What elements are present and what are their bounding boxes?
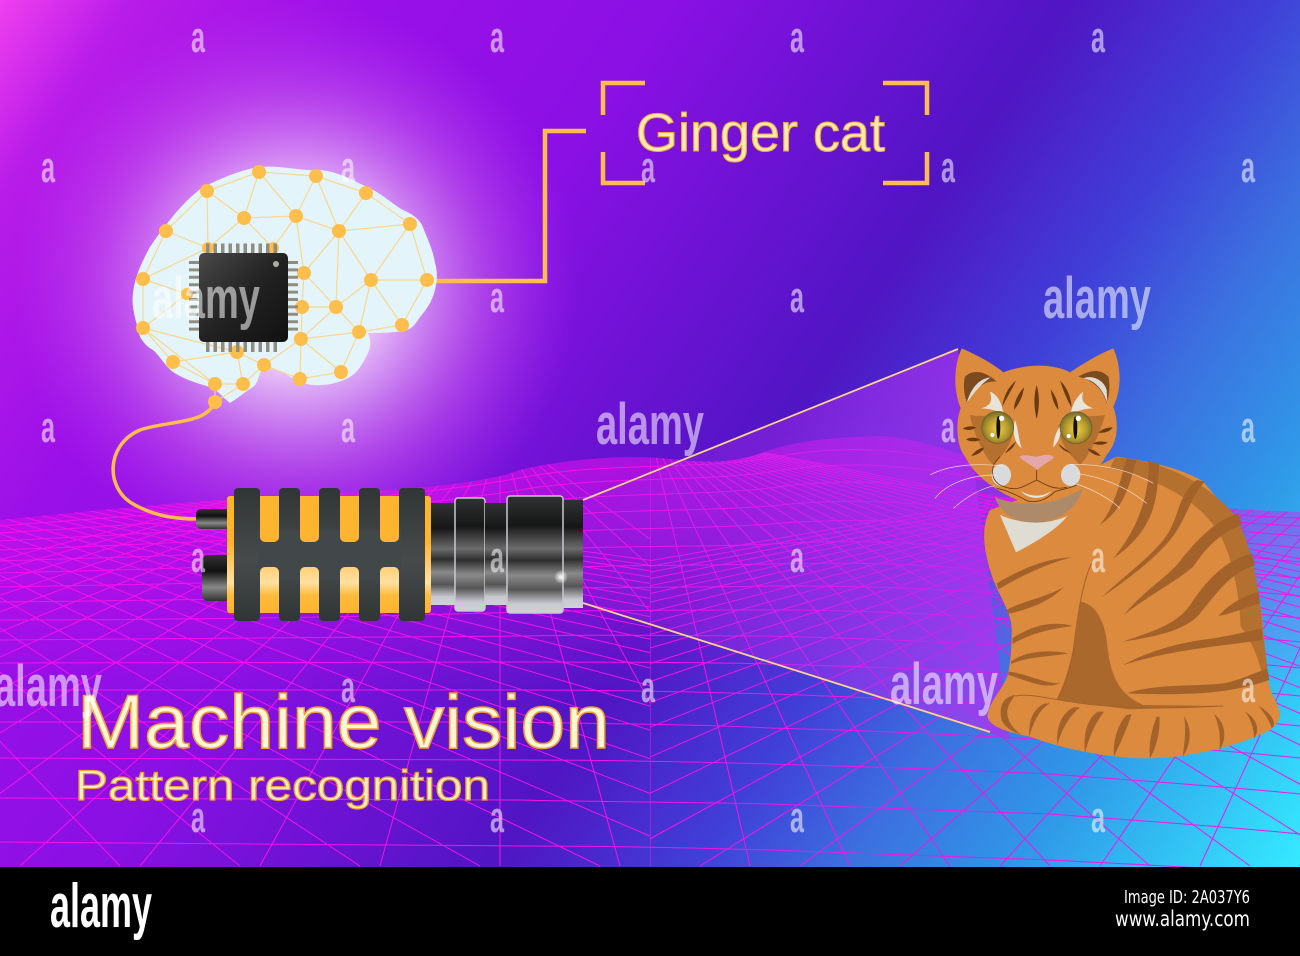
cat collar shading xyxy=(995,488,1083,523)
chip marker dot xyxy=(273,261,279,267)
stock watermarks: a xyxy=(1091,13,1105,62)
cat eye patches xyxy=(970,415,1105,465)
cat nose xyxy=(1019,455,1054,470)
stock watermarks: a xyxy=(1241,143,1255,192)
brain xyxy=(133,165,437,409)
stock watermarks: a xyxy=(490,13,504,62)
stock watermarks: a xyxy=(1091,533,1105,582)
stock watermarks: a xyxy=(1091,793,1105,842)
label brackets xyxy=(603,83,927,183)
brain silhouette xyxy=(133,167,437,403)
stock watermarks: a xyxy=(641,143,655,192)
stock watermarks: a xyxy=(941,143,955,192)
cable: camera to brain xyxy=(113,402,215,519)
stock watermarks: a xyxy=(641,663,655,712)
chip body xyxy=(199,253,288,342)
cat body stripes xyxy=(997,458,1269,694)
cat head xyxy=(955,348,1120,503)
subtitle: Pattern recognition xyxy=(75,762,490,810)
stock watermarks: a xyxy=(341,403,355,452)
stock watermarks: a xyxy=(790,793,804,842)
cat body xyxy=(984,457,1280,758)
neural network nodes xyxy=(136,165,434,409)
stock watermarks: alamy xyxy=(890,652,998,717)
stock watermarks: a xyxy=(490,533,504,582)
camera lens barrel xyxy=(431,496,583,613)
chip pins xyxy=(194,248,293,347)
footer bar xyxy=(0,867,1300,956)
stock watermarks: a xyxy=(790,13,804,62)
field of view lines xyxy=(583,349,990,732)
stock watermarks: a xyxy=(191,13,205,62)
camera rear connectors xyxy=(196,509,232,601)
website: www.alamy.com xyxy=(1115,907,1250,931)
connector wire: brain to label xyxy=(427,131,586,281)
neural network edges xyxy=(143,172,427,402)
stock watermarks: alamy xyxy=(1043,266,1151,331)
cat xyxy=(930,348,1280,758)
stock watermarks: a xyxy=(341,143,355,192)
cat muzzle xyxy=(992,457,1080,502)
title: Machine vision xyxy=(77,680,610,765)
cat back band xyxy=(1110,457,1268,682)
cat chest patch xyxy=(1000,515,1067,552)
cat forehead and cheek stripes xyxy=(963,381,1113,456)
image id: Image ID: 2A037Y6 xyxy=(1124,887,1250,908)
stock watermarks: a xyxy=(490,793,504,842)
cat foreleg line xyxy=(1057,563,1092,699)
stock watermarks: alamy xyxy=(596,392,704,457)
stock watermarks: a xyxy=(941,403,955,452)
stock watermarks: alamy xyxy=(152,266,260,331)
label: Ginger cat: Ginger cat xyxy=(636,103,885,163)
camera yellow housing xyxy=(227,496,431,613)
field of view cone xyxy=(583,349,1010,740)
cat tail stripes xyxy=(1001,695,1274,758)
brain glow xyxy=(10,0,580,570)
camera yellow windows xyxy=(260,496,399,613)
cat whiskers xyxy=(930,464,1153,508)
icon: microchip xyxy=(194,248,293,347)
stock watermarks: a xyxy=(341,663,355,712)
cat eyes xyxy=(982,411,1092,444)
camera dark fins xyxy=(234,488,425,621)
stock watermarks: a xyxy=(790,533,804,582)
stock watermarks: a xyxy=(191,533,205,582)
cat hind leg xyxy=(1057,602,1223,709)
cat brow marks xyxy=(981,392,1093,448)
stock watermarks: a xyxy=(790,273,804,322)
stock watermarks: a xyxy=(1241,663,1255,712)
stock watermarks: a xyxy=(490,273,504,322)
stock watermarks: a xyxy=(41,403,55,452)
cat inner ears xyxy=(964,371,1109,403)
stock watermarks: a xyxy=(41,143,55,192)
wireframe terrain xyxy=(0,430,1300,876)
stock watermarks: a xyxy=(191,793,205,842)
stock watermarks: a xyxy=(1241,403,1255,452)
camera xyxy=(196,488,583,621)
footer logo: alamy xyxy=(50,872,152,941)
cat tail outline xyxy=(1015,695,1223,708)
